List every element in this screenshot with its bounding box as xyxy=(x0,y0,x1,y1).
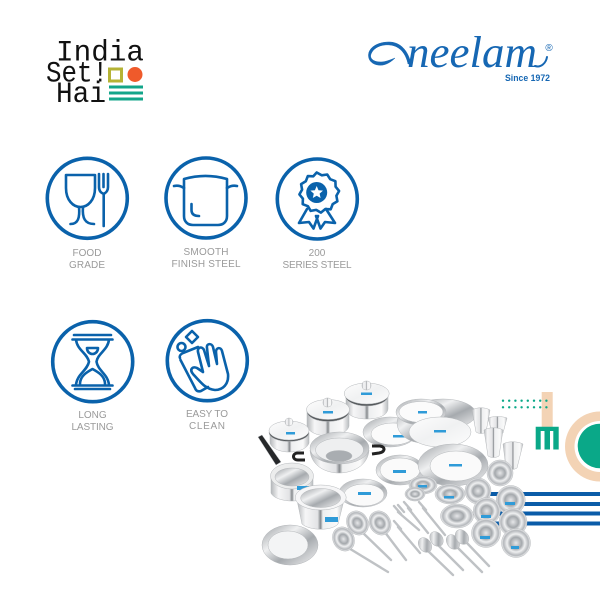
product photo: stainless steel dinner set xyxy=(258,381,530,575)
label: easy to clean: CLEAN xyxy=(189,421,225,432)
label: long lasting: LASTING xyxy=(72,422,114,433)
label: smooth finish steel: FINISH STEEL xyxy=(172,259,241,270)
logo: India Set Hai: India xyxy=(56,36,144,70)
glasses xyxy=(472,408,523,470)
saucepan front xyxy=(295,485,346,529)
label: easy to clean: EASY TO xyxy=(186,409,228,420)
icon: food grade xyxy=(47,158,127,238)
saucepan with handle xyxy=(258,435,314,501)
label: smooth finish steel: SMOOTH xyxy=(184,247,228,258)
bowls xyxy=(465,460,530,558)
icon: easy to clean xyxy=(167,321,247,401)
logo: Neelam: ® xyxy=(545,43,553,54)
logo: India Set Hai: Set! xyxy=(46,58,108,92)
label: food grade: GRADE xyxy=(69,260,105,271)
decoration: fork and ring xyxy=(502,392,600,482)
stacked plates top right xyxy=(396,399,476,447)
label: food grade: FOOD xyxy=(73,248,101,259)
large plate back xyxy=(363,417,417,447)
pot 3 with lid xyxy=(344,381,389,419)
label: long lasting xyxy=(72,410,114,433)
icon: hourglass xyxy=(53,322,133,402)
pot 1 with lid xyxy=(269,418,309,452)
label: easy to clean xyxy=(186,409,228,432)
label: 200 series steel: SERIES STEEL xyxy=(282,260,352,271)
icon: 200 series rosette xyxy=(277,159,357,239)
logo: Neelam: neelam xyxy=(407,28,537,77)
plates middle xyxy=(339,444,488,528)
label: 200 series steel xyxy=(282,248,352,271)
label: 200 series steel: 200 xyxy=(309,248,326,259)
logo: India Set Hai xyxy=(46,36,144,112)
label: smooth finish steel xyxy=(172,247,241,270)
decoration: blue stripes xyxy=(488,492,600,526)
icon: smooth finish pot xyxy=(166,158,246,238)
logo: Neelam: Since 1972 xyxy=(505,73,550,84)
wok with handles xyxy=(294,432,384,473)
pot 2 with lid xyxy=(306,398,350,436)
lid xyxy=(262,525,318,565)
label: long lasting: LONG xyxy=(78,410,107,421)
spoons and forks xyxy=(328,502,489,575)
logo: Neelam xyxy=(368,28,553,84)
label: food grade xyxy=(69,248,105,271)
logo: India Set Hai: Hai xyxy=(56,78,106,112)
